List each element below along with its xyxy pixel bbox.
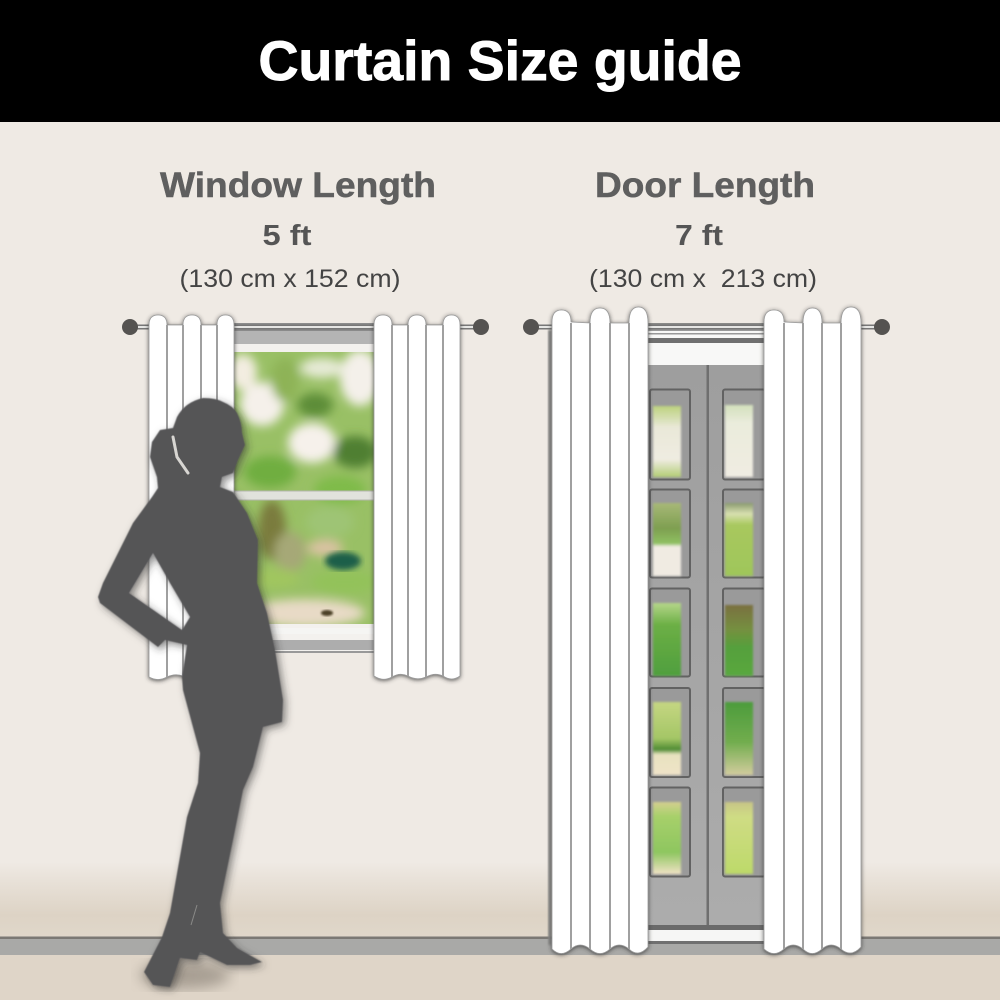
heading: window length: 5 ft xyxy=(262,220,312,252)
heading: window length: Window Length xyxy=(160,166,436,205)
window left curtain xyxy=(149,315,234,680)
door header xyxy=(645,323,767,365)
door left curtain xyxy=(548,307,648,954)
door right curtain xyxy=(764,307,861,954)
window right curtain xyxy=(374,315,460,679)
heading: door length: Door Length xyxy=(595,166,815,205)
heading: door length: 7 ft xyxy=(675,220,723,252)
door threshold xyxy=(645,925,767,944)
header banner xyxy=(0,0,1000,122)
window xyxy=(229,323,380,653)
window curtain rod xyxy=(122,319,489,335)
door xyxy=(645,323,767,944)
window muntin xyxy=(234,491,374,500)
heading: window length xyxy=(160,166,436,293)
door glass panes xyxy=(653,405,753,874)
door pane frames xyxy=(650,390,765,876)
door panel xyxy=(648,365,764,925)
heading: door length: (130 cm x 213 cm) xyxy=(589,265,817,293)
boot highlight xyxy=(191,905,197,925)
floor xyxy=(0,955,1000,1000)
ponytail highlight xyxy=(173,437,188,473)
title: Curtain Size guide xyxy=(258,29,742,92)
lower wall shading xyxy=(0,862,1000,938)
baseboard xyxy=(0,936,1000,955)
woman silhouette xyxy=(98,398,283,989)
window view xyxy=(229,350,380,627)
heading: window length: (130 cm x 152 cm) xyxy=(180,265,400,293)
door split xyxy=(706,365,709,925)
door curtain rod xyxy=(523,319,890,335)
window frame xyxy=(230,323,378,653)
heading: door length xyxy=(589,166,817,293)
floor shadow xyxy=(140,961,230,989)
